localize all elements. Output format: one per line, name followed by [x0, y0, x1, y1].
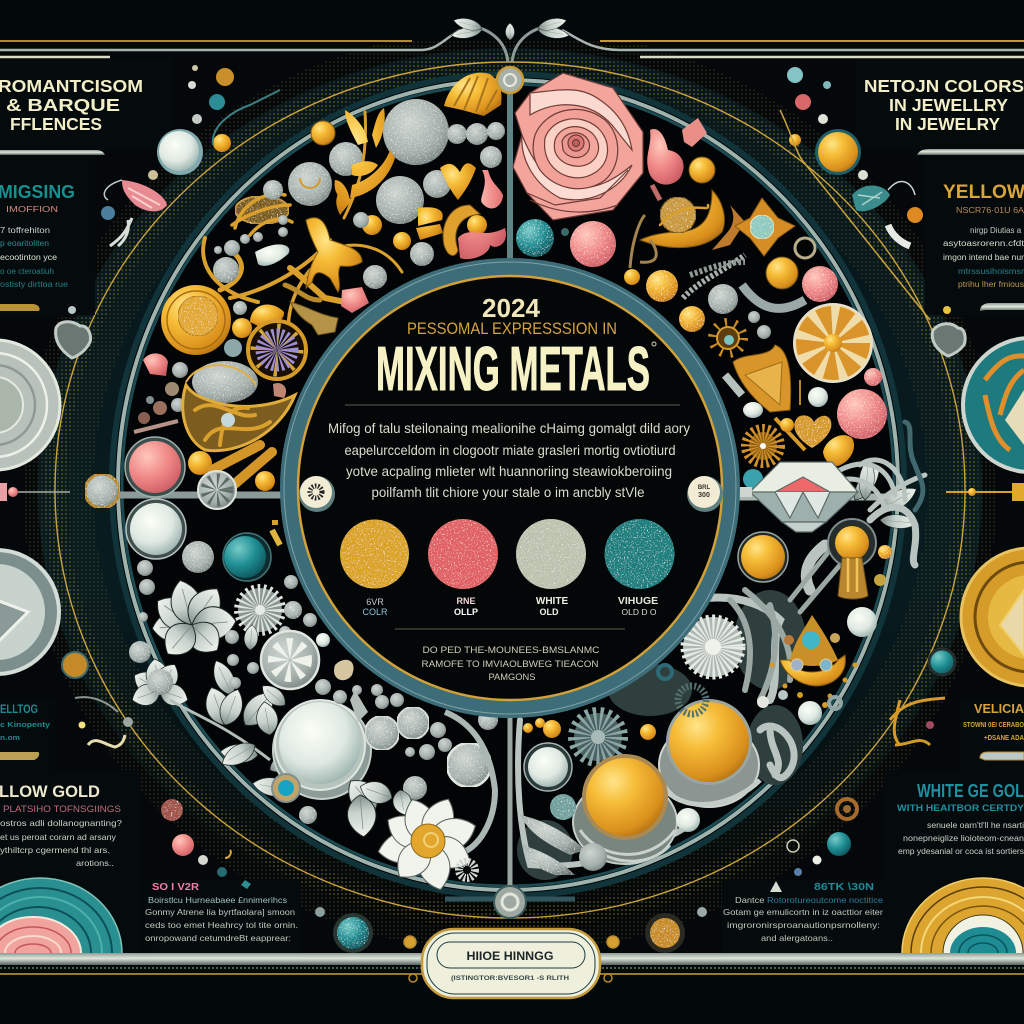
spokes — [118, 85, 900, 890]
body text: eapelurcceldom in clogootr miate grasleri mortig ovtiotiurd — [344, 442, 676, 458]
left panel: mixing: IMOFFION — [6, 205, 58, 214]
right concentric rings — [901, 877, 1024, 953]
year: 2024 — [482, 293, 541, 323]
left panel: yellow gold: et us peroat corarn ad arsany — [0, 832, 117, 842]
left panel: mixing: ecootinton yce — [0, 253, 58, 262]
left panel: mixing: 7 toffrehiton — [0, 226, 50, 235]
gold branch — [335, 108, 395, 218]
right knob — [687, 476, 723, 512]
pink rose — [513, 73, 643, 220]
white flower — [376, 793, 481, 894]
body text — [328, 420, 690, 500]
right decor bottom — [645, 649, 955, 953]
coral pearl — [125, 437, 185, 497]
gold claw with filigree — [640, 190, 745, 250]
left panel: mixing: p eoaritoliten — [0, 239, 49, 248]
bottom hub — [445, 886, 575, 918]
mid-left text block — [145, 880, 298, 943]
teal pearl — [223, 533, 271, 581]
teal glitter ball — [516, 219, 554, 257]
right panel heading: IN JEWELRY — [895, 114, 1000, 134]
silver swirls — [518, 545, 840, 866]
left panel: yellow gold: ostros adli dollanognanting? — [0, 818, 122, 828]
body text: yotve acpaling mlieter wlt huannoriing steawiokberoiing — [346, 463, 672, 479]
diamond — [750, 462, 858, 532]
gold filigree cluster — [203, 194, 402, 350]
right small heading — [963, 701, 1024, 742]
gold sun — [714, 324, 742, 352]
right divider lower — [980, 303, 1024, 311]
swatch: vintage — [604, 519, 674, 617]
footnote text: DO PED THE-MOUNEES-BMSLANMC — [422, 645, 600, 656]
pink glitter ball — [802, 266, 838, 302]
teal gem — [272, 774, 300, 802]
ornament leaves — [450, 15, 570, 41]
swatch: white — [516, 519, 586, 617]
dark foliage fill — [517, 590, 806, 880]
mid-right text block: Gotam ge emulicortn in iz oacttior eiter — [723, 907, 883, 917]
right panel: yellow: ptrihu lher fmious — [958, 280, 1024, 289]
gold wheel brooch with star — [248, 321, 306, 379]
gold shell — [444, 73, 502, 116]
gold ball large second — [582, 754, 668, 840]
silver flower lower-left — [129, 641, 191, 710]
swatch: gold: 6VR — [366, 597, 384, 607]
plaque — [422, 929, 600, 998]
right panel: yellow: imgon intend bae nur — [943, 253, 1024, 262]
gold cross with teal stone — [735, 198, 795, 256]
gold lion figure — [306, 218, 362, 292]
gold crown — [780, 615, 845, 686]
pink glitter ball — [837, 389, 887, 439]
silver cut stone — [198, 471, 236, 509]
right panel: white gold: WITH HEAITBOR CERTDY — [897, 803, 1024, 813]
gold ball large — [666, 699, 752, 785]
plaque subtitle: (ISTINGTOR:BVESOR1 -S RLITH — [451, 976, 569, 982]
silver base of gold ball — [659, 723, 759, 807]
right gold disc — [961, 548, 1024, 686]
mid-left text block: ceds too emet Heahrcy tol tite ornin. — [145, 920, 298, 930]
crystal bloom — [574, 713, 622, 761]
right panel: yellow — [943, 182, 1024, 289]
left decor top — [56, 65, 280, 358]
spiky white bloom — [683, 617, 743, 677]
left concentric rings — [0, 877, 123, 953]
left connector — [0, 483, 70, 501]
silver swirls right — [840, 422, 925, 565]
swatch: rose: RNE — [456, 596, 476, 606]
right panel: yellow: asytoasrorenn.cfdt — [943, 239, 1024, 248]
teal glitter ball — [550, 794, 576, 820]
gold ball — [815, 129, 861, 175]
big sunburst disc — [794, 304, 872, 382]
left top divider — [0, 150, 105, 155]
gold ball — [738, 532, 788, 582]
body text: Mifog of talu steilonaing mealionihe cHaimg gomalgt dild aory — [328, 420, 690, 436]
leaf behind disc — [208, 657, 240, 699]
left top heading: & BARQUE — [6, 95, 120, 115]
top hub — [497, 67, 523, 93]
teal ribbon — [852, 182, 915, 211]
silver flower upper — [149, 576, 237, 664]
quadrant: silver and gold — [517, 519, 892, 880]
gold keyhole — [828, 519, 876, 599]
mid-left text block: Boirstlcu Hurneabaee £nnimerihcs — [148, 895, 287, 905]
pink ribbon — [104, 180, 167, 211]
small ring — [795, 238, 815, 258]
small silver settings — [315, 679, 498, 800]
left panel: mixing: MIGSING — [0, 182, 75, 202]
swatch: vintage: OLD D O — [622, 607, 657, 617]
right teal disc — [963, 338, 1024, 472]
quadrant: gold and silver jewellery — [85, 73, 506, 509]
pink rosette — [143, 353, 168, 376]
bottom cover — [0, 953, 1024, 1024]
left small heading — [0, 702, 51, 742]
gold and silver knob — [85, 474, 119, 508]
silver leaves — [520, 815, 607, 875]
left top heading — [0, 76, 143, 134]
right panel heading: IN JEWELLRY — [889, 95, 1008, 115]
swatch: vintage: VIHUGE — [618, 595, 658, 607]
mid-right text block: 86TK \30N — [814, 881, 874, 893]
left small divider — [0, 752, 39, 760]
silver leaf — [243, 624, 259, 651]
right panel: yellow: mtrssusihoismsr — [958, 267, 1024, 276]
pearl — [524, 743, 572, 791]
plaque title: HIIOE HINNGG — [466, 951, 554, 963]
left small heading: n.om — [0, 733, 20, 742]
footnote text: PAMGONS — [488, 672, 536, 683]
gold harp — [733, 345, 791, 412]
title block — [376, 293, 656, 404]
left panel: yellow gold: LLOW GOLD — [0, 782, 100, 801]
left decor bottom — [62, 652, 373, 953]
left panel: yellow gold: PLATSIHO TOFNSGIINGS — [3, 804, 121, 814]
mid-left text block: SO I V2R — [152, 881, 199, 893]
quadrant: rose gold and rose — [513, 73, 925, 565]
left top heading: ROMANTCISOM — [0, 76, 143, 96]
right small divider — [980, 752, 1024, 760]
gold heart — [794, 415, 831, 448]
bottom frame — [0, 953, 1024, 974]
gold bead — [645, 913, 685, 953]
left panel: yellow gold: ythiltcrp cgermend thl ars. — [0, 845, 110, 855]
top frame with ornament — [0, 15, 1024, 62]
pink figure — [647, 118, 707, 200]
pearl — [157, 129, 203, 175]
right panel: white gold: senuele oarn'tl'll he nsarti — [927, 821, 1024, 830]
silver heart — [932, 324, 965, 356]
left small heading: c Kinopenty — [0, 720, 51, 729]
leaves — [200, 680, 299, 799]
swatch: white: WHITE — [536, 596, 568, 607]
leaves lower — [340, 772, 413, 838]
swatch: rose — [428, 519, 498, 617]
gold medallion — [161, 285, 231, 355]
large pearl — [273, 700, 371, 799]
gold starburst — [749, 432, 777, 460]
mid-left text block: onropowand cetumdreBt eapprear: — [145, 933, 291, 943]
left panel: yellow gold — [0, 782, 122, 868]
left lower silver disc — [0, 550, 59, 674]
right small heading: VELICIA — [974, 701, 1024, 716]
right panel: yellow: YELLOW — [943, 182, 1024, 203]
swatch: gold: COLR — [362, 607, 388, 617]
footnote text — [422, 645, 600, 683]
right panel: white gold — [897, 781, 1024, 856]
pink stone — [341, 287, 369, 313]
inner medallion — [284, 262, 736, 714]
body text: poilfamh tlit chiore your stale o im ancbly stVle — [372, 484, 645, 500]
top cover — [0, 0, 1024, 40]
right panel: white gold: nonepneiglize lioioteom-cnean — [903, 834, 1024, 843]
pearls — [847, 607, 877, 637]
right knob: BRL — [698, 485, 710, 491]
subtitle: PESSOMAL EXPRESSSION IN — [407, 319, 617, 338]
mid-right text block: imgroronirsproanautionpsrnolleny: — [727, 920, 880, 930]
left small heading: ELLTOG — [0, 702, 38, 716]
silver disc — [261, 631, 319, 689]
right knob: 300 — [698, 492, 710, 499]
silver heart — [56, 322, 91, 358]
gold teardrop filigree — [183, 385, 295, 451]
pink glitter ball — [570, 221, 616, 267]
right decor top — [780, 67, 965, 356]
swatch: gold — [340, 520, 409, 617]
left knob — [299, 476, 335, 512]
quadrant: silver and white flowers — [126, 499, 498, 894]
gold bead and teal curve — [213, 90, 280, 152]
swatch: rose: OLLP — [454, 607, 478, 617]
left panel: mixing: o oe cteroatiuh — [0, 267, 54, 276]
left panel: mixing — [0, 182, 75, 289]
right top divider — [917, 149, 1024, 155]
left top heading: FFLENCES — [10, 114, 102, 134]
mid-right text block: Dantce Rotorotureoutcome noctitice — [735, 895, 883, 905]
silver glitter ball — [708, 284, 738, 314]
right panel: white gold: emp ydesanial or coca ist sortiers — [898, 847, 1024, 856]
right panel heading — [864, 76, 1024, 134]
title mark — [652, 342, 656, 346]
gold swirl with pink flowers — [416, 170, 506, 259]
left panel: mixing: ostisty dirttoa rue — [0, 280, 69, 289]
dark teal field around wheel — [38, 48, 982, 932]
central wheel — [112, 74, 904, 896]
right panel: yellow: NSCR76·01U 6A — [956, 206, 1024, 215]
spiky silver bloom — [238, 588, 282, 632]
silver base of second gold ball — [573, 780, 677, 864]
right panel heading: NETOJN COLORS — [864, 76, 1024, 96]
main title: MIXING METALS — [376, 335, 650, 404]
left divider lower — [0, 304, 40, 311]
gold ball — [766, 257, 798, 289]
right connector — [946, 483, 1024, 501]
left silver disc — [0, 340, 60, 470]
large textured silver disc — [383, 99, 449, 165]
mid-right text block — [723, 881, 883, 943]
swatch: white: OLD — [540, 607, 559, 617]
pearl — [126, 499, 186, 559]
gold and silver bird — [290, 302, 338, 335]
footnote text: RAMOFE TO IMVIAOLBWEG TIEACON — [422, 659, 599, 670]
small silver beads — [213, 180, 387, 357]
mid-right text block: and alergatoans.. — [761, 933, 833, 943]
ornament scrolls — [462, 26, 558, 62]
flanking ornaments of plaque — [404, 936, 619, 982]
gold scrolls — [188, 445, 275, 491]
halftone gold dot band — [55, 62, 965, 918]
gold shell — [823, 435, 854, 466]
mid-left text block: Gonmy Atrene lia byrtfaolara] smoon — [145, 907, 295, 917]
right panel: yellow: nirgp Diutias a — [970, 226, 1022, 235]
silver oval plate — [192, 361, 258, 403]
teal pearl — [333, 913, 373, 953]
left panel: yellow gold: arotions.. — [76, 858, 114, 868]
